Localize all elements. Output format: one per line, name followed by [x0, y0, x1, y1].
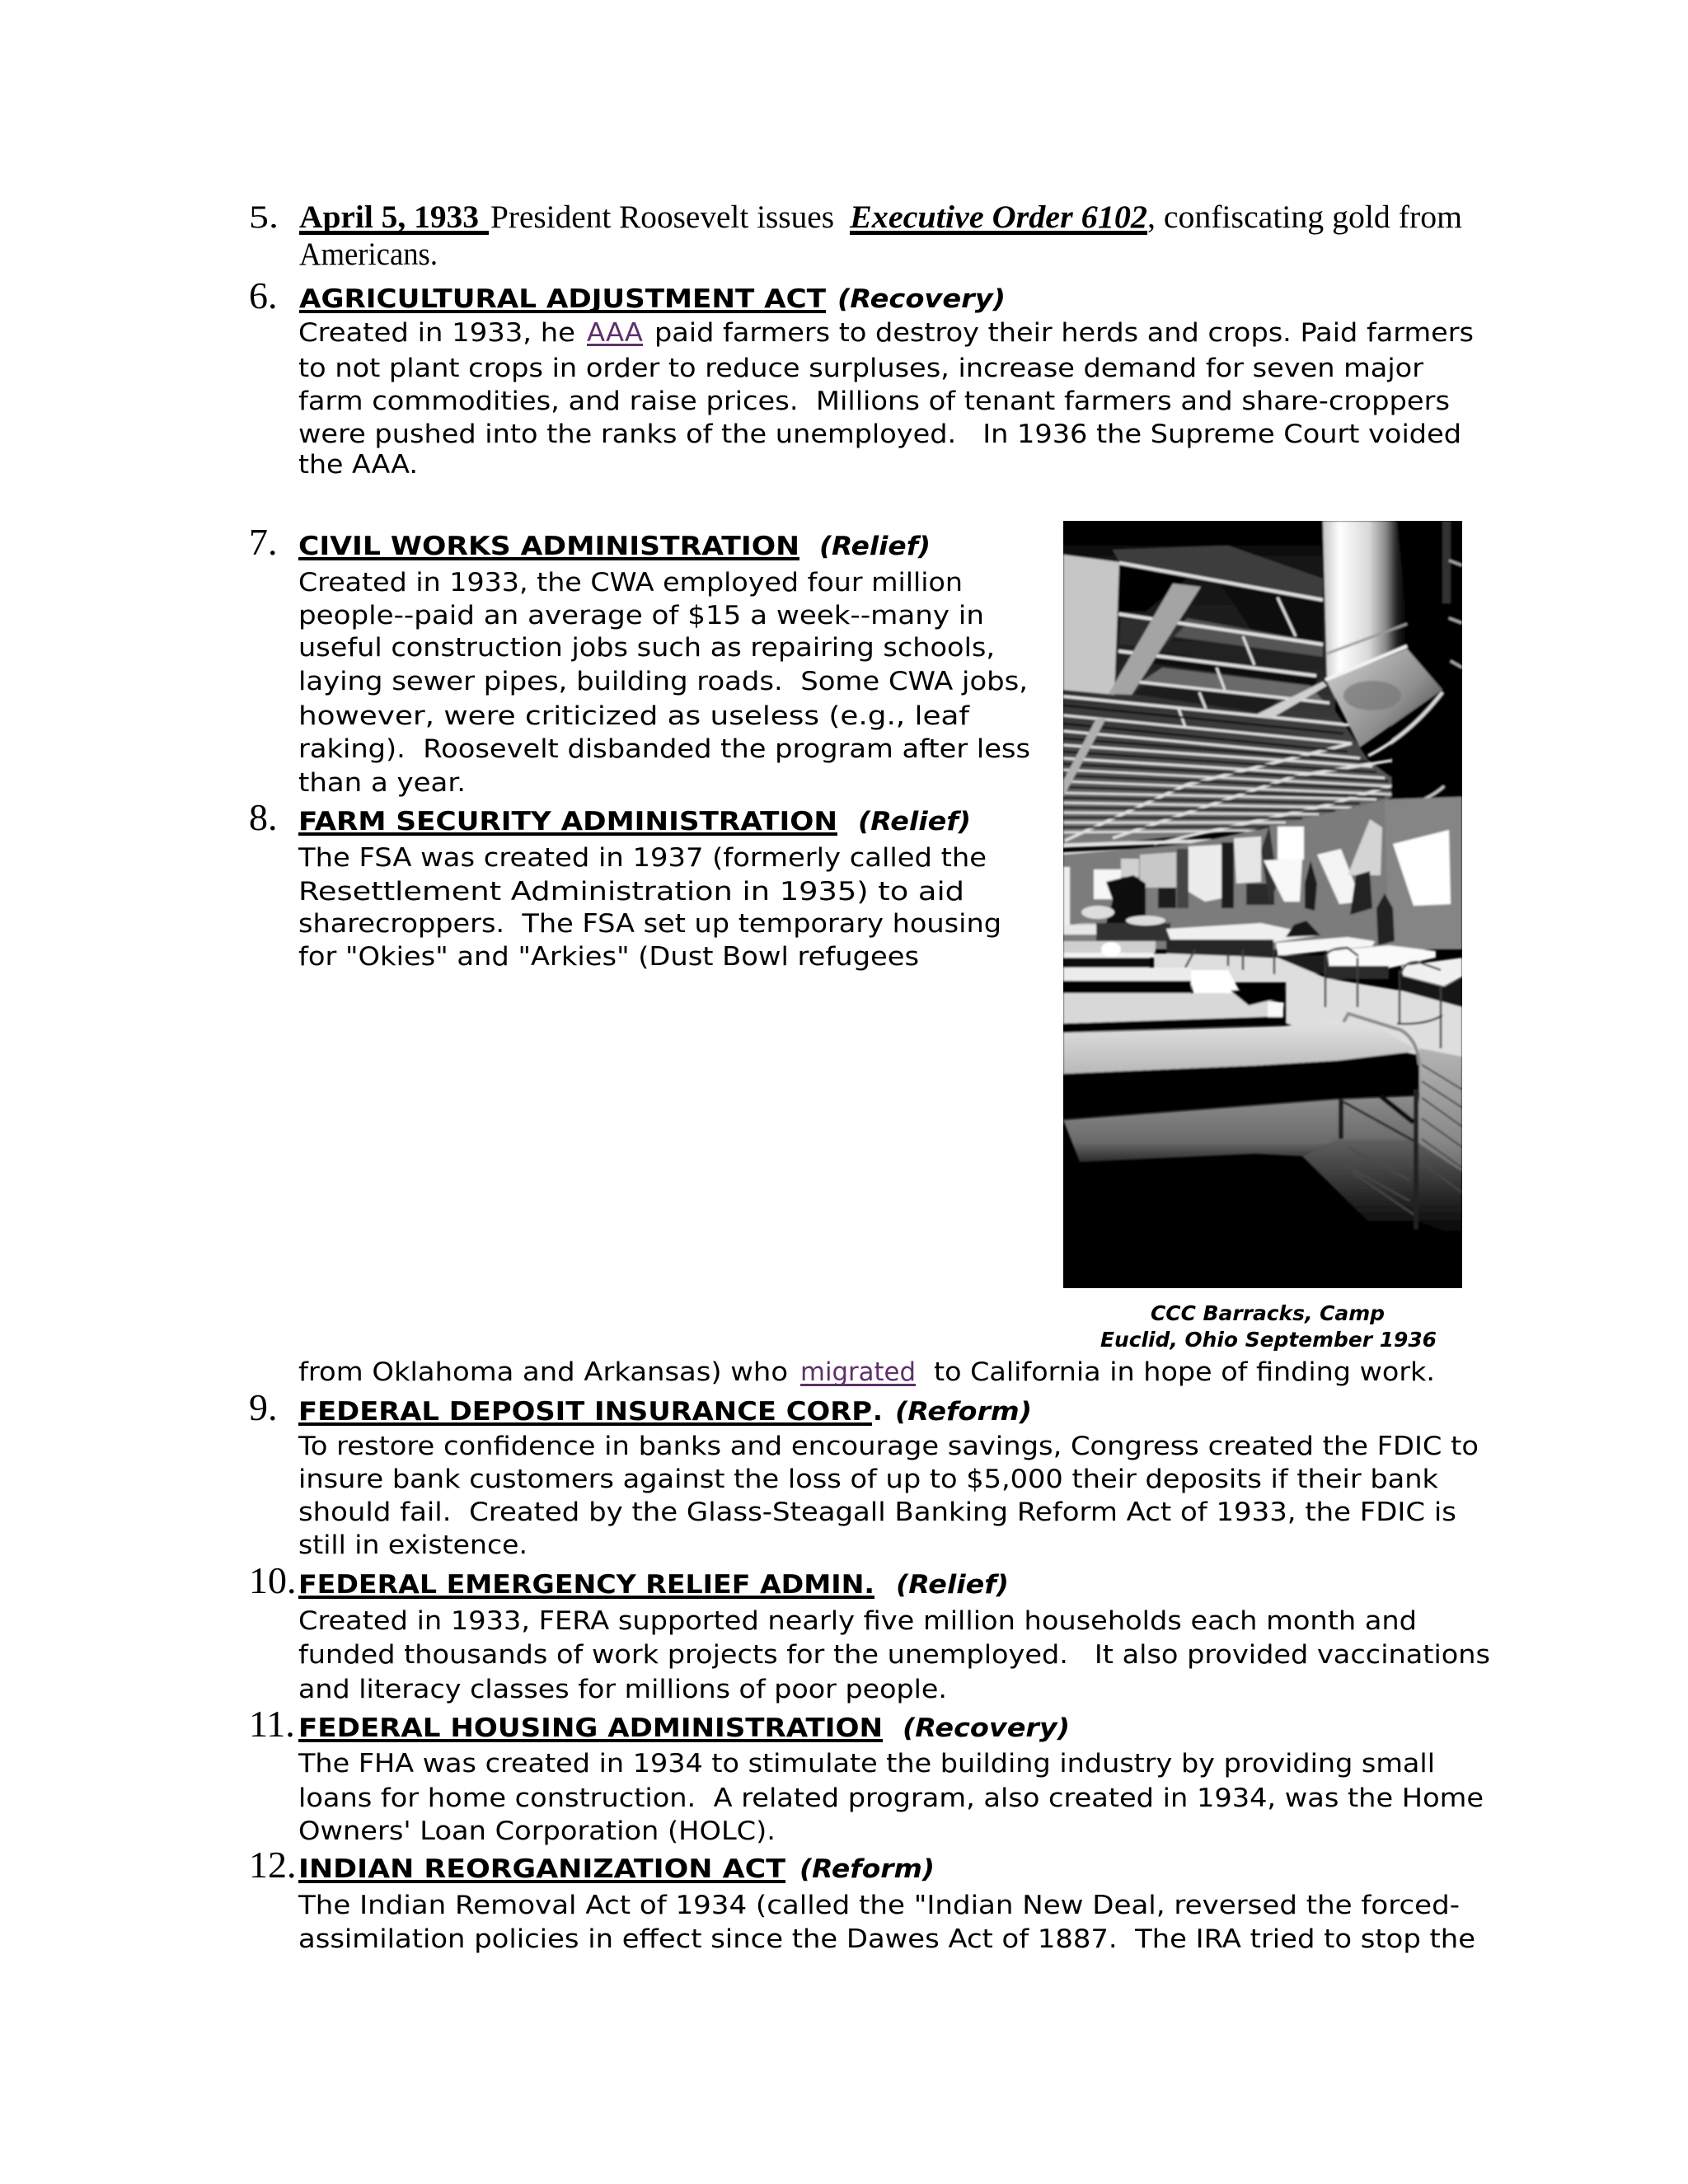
item 12: Indian Reorganization Act [249, 1844, 1475, 1954]
body text: should fail. Created by the Glass-Steagall Banking Reform Act of 1933, the FDIC is [298, 1497, 1456, 1527]
date heading: April 5, 1933 [299, 199, 479, 235]
number 11: 11. [249, 1703, 295, 1745]
number 7: 7. [249, 521, 277, 563]
body text: migrated [800, 1357, 916, 1387]
far beds [1166, 923, 1319, 943]
foreground floor right [1417, 1048, 1462, 1173]
category tag: (Reform) [799, 1854, 935, 1884]
duct elbow [1327, 649, 1442, 748]
body text [298, 1432, 1479, 1560]
foreground bed surface [1063, 1020, 1415, 1074]
number 8: 8. [249, 796, 277, 838]
heading: AGRICULTURAL ADJUSTMENT ACT [299, 284, 826, 314]
body text: to California in hope of finding work. [934, 1357, 1435, 1387]
left windows [1094, 869, 1121, 899]
clutter at left [1104, 875, 1146, 929]
number 9: 9. [249, 1386, 277, 1428]
heading: . [873, 1397, 883, 1427]
foreground floor left [1063, 1096, 1414, 1162]
hanging clothes and windows [1140, 852, 1176, 888]
body text: Created in 1933, he [298, 318, 575, 348]
heading: CIVIL WORKS ADMINISTRATION [298, 532, 799, 561]
body text: useful construction jobs such as repairing schools, [298, 633, 995, 663]
item 8: Farm Security Administration [249, 796, 1435, 1387]
body text: to not plant crops in order to reduce surpluses, increase demand for seven major [298, 354, 1423, 383]
body text: The FHA was created in 1934 to stimulate the building industry by providing small [298, 1749, 1435, 1779]
heading: FEDERAL DEPOSIT INSURANCE CORP [298, 1397, 872, 1427]
number 5: 5. [249, 199, 279, 235]
left duct [1063, 555, 1119, 695]
heading: FEDERAL EMERGENCY RELIEF ADMIN. [298, 1570, 874, 1600]
body text: The FSA was created in 1937 (formerly called the [298, 843, 987, 873]
body text: assimilation policies in effect since the Dawes Act of 1887. The IRA tried to stop the [298, 1924, 1475, 1954]
body text: Resettlement Administration in 1935) to aid [298, 877, 964, 907]
executive order title: Executive Order 6102 [849, 199, 1147, 235]
body text [298, 1606, 1490, 1704]
item 11: Federal Housing Administration [249, 1703, 1484, 1846]
body text: and literacy classes for millions of poor people. [298, 1675, 947, 1704]
body text: people--paid an average of $15 a week--many in [298, 601, 984, 630]
item 7: Civil Works Administration [249, 521, 1030, 798]
item 5: Executive Order 6102 [249, 199, 1462, 272]
body text [298, 1891, 1475, 1954]
number 6: 6. [249, 274, 277, 316]
foreground bed side [1063, 1052, 1419, 1118]
body text: loans for home construction. A related program, also created in 1934, was the Home [298, 1783, 1484, 1813]
category tag: (Reform) [895, 1397, 1032, 1427]
body text: To restore confidence in banks and encourage savings, Congress created the FDIC to [298, 1432, 1479, 1461]
number 12: 12. [249, 1844, 297, 1886]
body text [298, 1749, 1484, 1846]
photo caption: Euclid, Ohio September 1936 [1100, 1328, 1437, 1352]
number 10: 10. [249, 1559, 297, 1601]
body text: The Indian Removal Act of 1934 (called the "Indian New Deal, reversed the forced- [298, 1891, 1460, 1920]
left beds [1063, 941, 1156, 953]
body text: AAA [587, 318, 643, 348]
hat on bed [1231, 986, 1284, 1005]
photo: CCC barracks interior [1063, 521, 1462, 1288]
body text: raking). Roosevelt disbanded the program after less [298, 734, 1030, 764]
item 10: Federal Emergency Relief Admin [249, 1559, 1490, 1704]
body text: Created in 1933, the CWA employed four million [298, 568, 963, 598]
document page [251, 204, 1489, 1953]
main duct [1323, 521, 1407, 682]
sentence start: President Roosevelt issues [490, 199, 834, 235]
mid floor [1154, 954, 1462, 1065]
body text: insure bank customers against the loss of up to $5,000 their deposits if their bank [298, 1465, 1438, 1494]
body text: sharecroppers. The FSA set up temporary housing [298, 909, 1001, 939]
body text: the AAA. [298, 450, 418, 480]
body text: laying sewer pipes, building roads. Some CWA jobs, [298, 667, 1028, 696]
heading: FARM SECURITY ADMINISTRATION [298, 807, 837, 837]
far wall [1063, 797, 1462, 949]
item 6: Agricultural Adjustment Act [249, 274, 1474, 480]
category tag: (Relief) [819, 532, 931, 561]
floor boards [1348, 1063, 1462, 1216]
heading: FEDERAL HOUSING ADMINISTRATION [298, 1713, 883, 1743]
photo caption: CCC Barracks, Camp [1151, 1301, 1385, 1325]
category tag: (Relief) [896, 1570, 1009, 1600]
heading: INDIAN REORGANIZATION ACT [298, 1854, 785, 1884]
body text: than a year. [298, 768, 466, 798]
body text: Created in 1933, FERA supported nearly five million households each month and [298, 1606, 1417, 1636]
category tag: (Recovery) [903, 1713, 1070, 1743]
bed frame [1343, 1014, 1419, 1065]
body text [298, 318, 1474, 480]
body text: Owners' Loan Corporation (HOLC). [298, 1816, 776, 1846]
body text [298, 843, 1435, 1387]
category tag: (Relief) [858, 807, 971, 837]
category tag: (Recovery) [837, 284, 1006, 314]
photo caption [1100, 1301, 1437, 1352]
second line: Americans. [299, 237, 438, 272]
bed legs mid [1183, 948, 1442, 1048]
ceiling beams [1063, 563, 1401, 854]
diagonal boards [1109, 583, 1201, 695]
body text: from Oklahoma and Arkansas) who [298, 1357, 788, 1387]
body text: farm commodities, and raise prices. Millions of tenant farmers and share-croppers [298, 387, 1450, 416]
body text: still in existence. [298, 1530, 528, 1560]
body text: however, were criticized as useless (e.g., leaf [298, 701, 970, 731]
body text: for "Okies" and "Arkies" (Dust Bowl refugees [298, 942, 919, 972]
body text [298, 568, 1030, 798]
body text: paid farmers to destroy their herds and crops. Paid farmers [654, 318, 1474, 348]
sentence end: , confiscating gold from [1147, 199, 1462, 235]
item 9: Federal Deposit Insurance Corp [249, 1386, 1479, 1560]
body text: were pushed into the ranks of the unemployed. In 1936 the Supreme Court voided [298, 419, 1461, 449]
ceiling [1063, 521, 1407, 848]
body text: funded thousands of work projects for the unemployed. It also provided vaccinations [298, 1640, 1490, 1670]
right black area [1391, 521, 1462, 801]
